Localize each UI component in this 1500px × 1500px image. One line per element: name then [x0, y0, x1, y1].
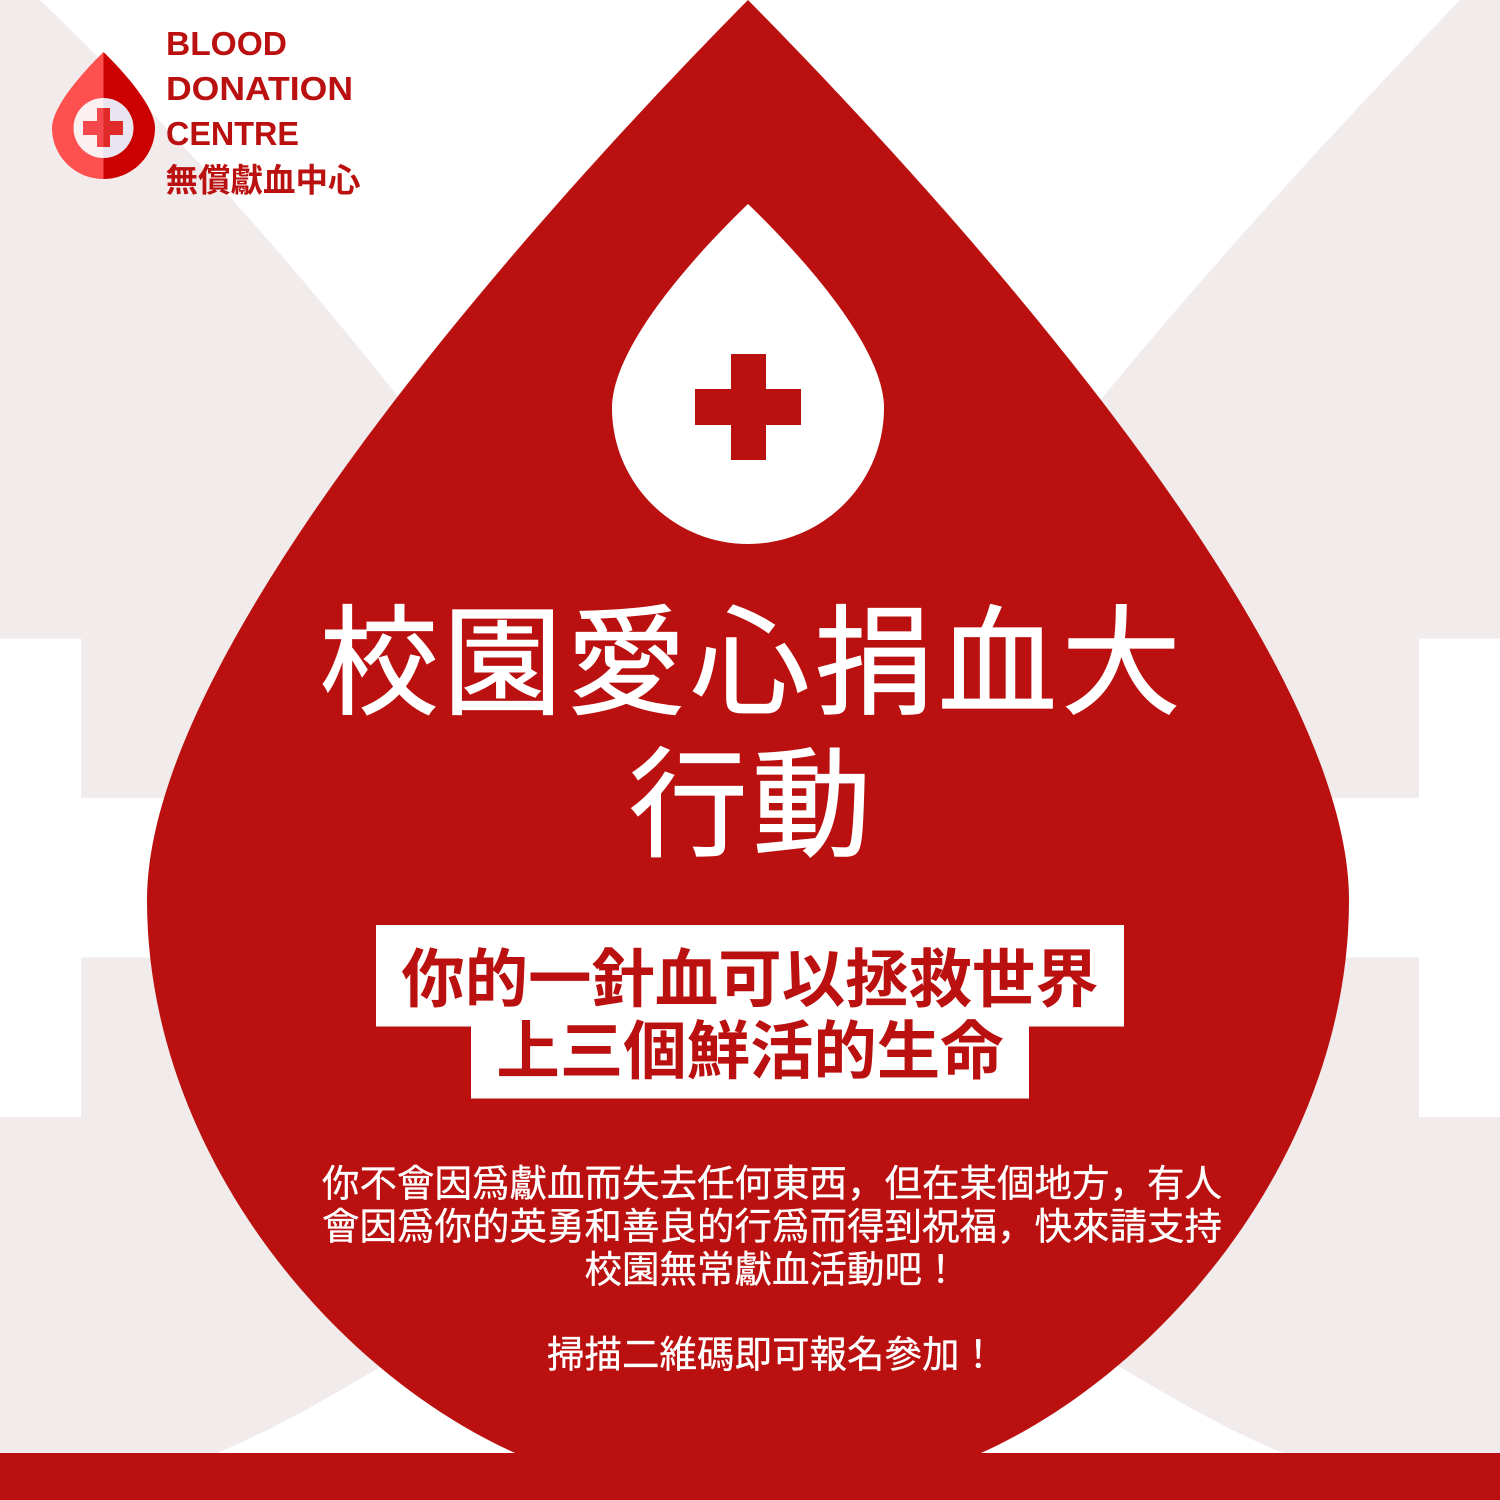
logo text: CENTRE — [166, 115, 299, 152]
body text: 會因爲你的英勇和善良的行爲而得到祝福，快來請支持 — [322, 1206, 1222, 1248]
title — [319, 598, 1185, 872]
subtitle: 上三個鮮活的生命 — [496, 1018, 1004, 1088]
subtitle — [401, 946, 1099, 1088]
subtitle highlight boxes — [376, 925, 1124, 1098]
subtitle: 你的一針血可以拯救世界 — [401, 946, 1099, 1016]
body text: 掃描二維碼即可報名參加！ — [547, 1334, 997, 1376]
logo text: 無償獻血中心 — [166, 162, 361, 198]
logo text: BLOOD — [166, 25, 287, 62]
background: right white cross — [1200, 638, 1500, 1117]
title: 校園愛心捐血大 — [319, 598, 1185, 730]
logo icon: blood drop with cross — [52, 52, 155, 179]
title: 行動 — [629, 740, 876, 872]
body text — [322, 1162, 1222, 1376]
icon: white drop with red cross — [612, 204, 884, 544]
background: left white cross — [0, 638, 300, 1117]
bottom red bar — [0, 1453, 1500, 1500]
body text: 校園無常獻血活動吧！ — [584, 1248, 960, 1290]
background: right pale drop — [1080, 0, 1500, 1453]
logo text — [166, 25, 361, 198]
background: left pale drop — [0, 0, 420, 1453]
body text: 你不會因爲獻血而失去任何東西，但在某個地方，有人 — [322, 1162, 1222, 1204]
logo text: DONATION — [166, 70, 353, 107]
